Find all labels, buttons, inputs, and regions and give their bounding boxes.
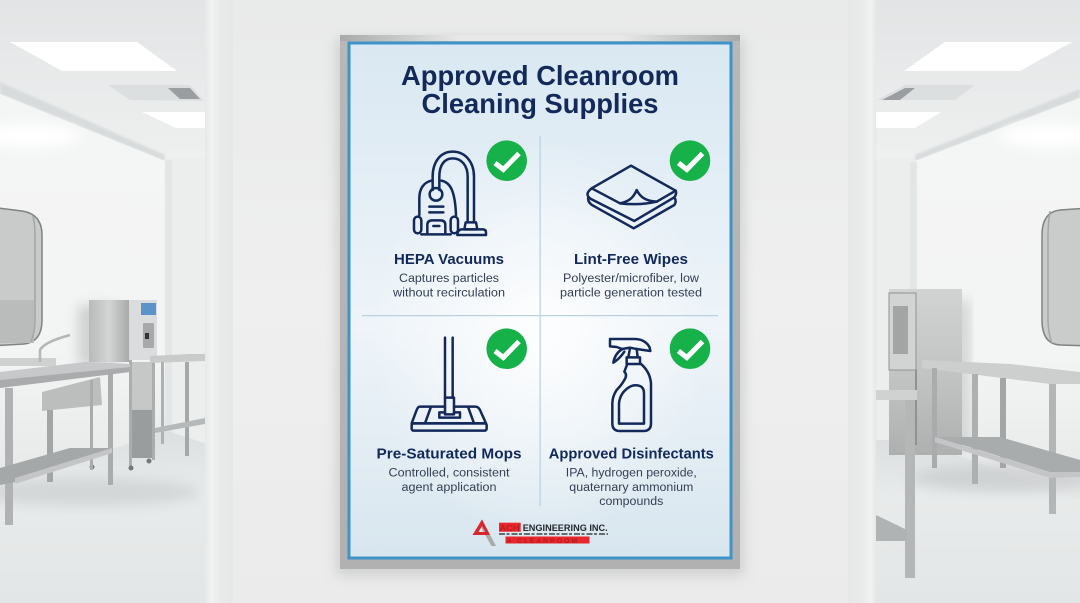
panel: pre-saturated mops	[376, 328, 527, 494]
check badge	[486, 140, 527, 181]
left room background	[0, 0, 210, 603]
heading: Lint-Free Wipes: Lint-Free Wipes	[574, 252, 688, 268]
description: agent application	[402, 482, 496, 494]
description	[566, 468, 697, 508]
description	[388, 468, 510, 494]
right room window	[1042, 208, 1080, 346]
icon: folded wipes	[587, 166, 676, 228]
icon: vacuum	[414, 152, 486, 235]
left room window	[0, 207, 42, 346]
description: Polyester/microfiber, low	[563, 273, 700, 285]
description	[392, 273, 505, 300]
description: IPA, hydrogen peroxide,	[566, 468, 697, 480]
left room equipment	[0, 300, 205, 525]
left pillar	[205, 0, 233, 603]
heading: Approved Disinfectants: Approved Disinfectants	[549, 446, 714, 462]
central wall	[233, 0, 848, 603]
description	[560, 273, 702, 300]
logo: ACH Engineering: ENGINEERING INC.	[523, 523, 608, 534]
description: quaternary ammonium	[569, 482, 693, 494]
heading: HEPA Vacuums: HEPA Vacuums	[394, 252, 504, 268]
title: Approved Cleanroom	[401, 60, 679, 91]
panel: lint-free wipes	[560, 140, 710, 300]
check badge	[670, 140, 710, 181]
description: Controlled, consistent	[388, 468, 510, 480]
title	[401, 60, 679, 119]
logo: ACH Engineering	[472, 520, 608, 546]
logo: ACH Engineering: A CLEANROOM	[507, 538, 577, 545]
description: Captures particles	[399, 273, 499, 285]
logo: ACH Engineering: ACH	[500, 523, 520, 533]
description: particle generation tested	[560, 288, 702, 300]
right room equipment	[876, 289, 1080, 578]
title: Cleaning Supplies	[422, 88, 658, 119]
panel: HEPA vacuums	[392, 140, 527, 300]
heading: Pre-Saturated Mops: Pre-Saturated Mops	[376, 446, 522, 462]
check badge	[670, 328, 710, 369]
panel: approved disinfectants	[549, 328, 714, 508]
icon: mop	[412, 338, 487, 431]
description: compounds	[599, 496, 664, 508]
right room background	[870, 0, 1080, 603]
description: without recirculation	[392, 288, 505, 300]
icon: spray bottle	[610, 339, 651, 431]
check badge	[486, 328, 527, 369]
poster	[336, 35, 744, 576]
right pillar	[848, 0, 876, 603]
